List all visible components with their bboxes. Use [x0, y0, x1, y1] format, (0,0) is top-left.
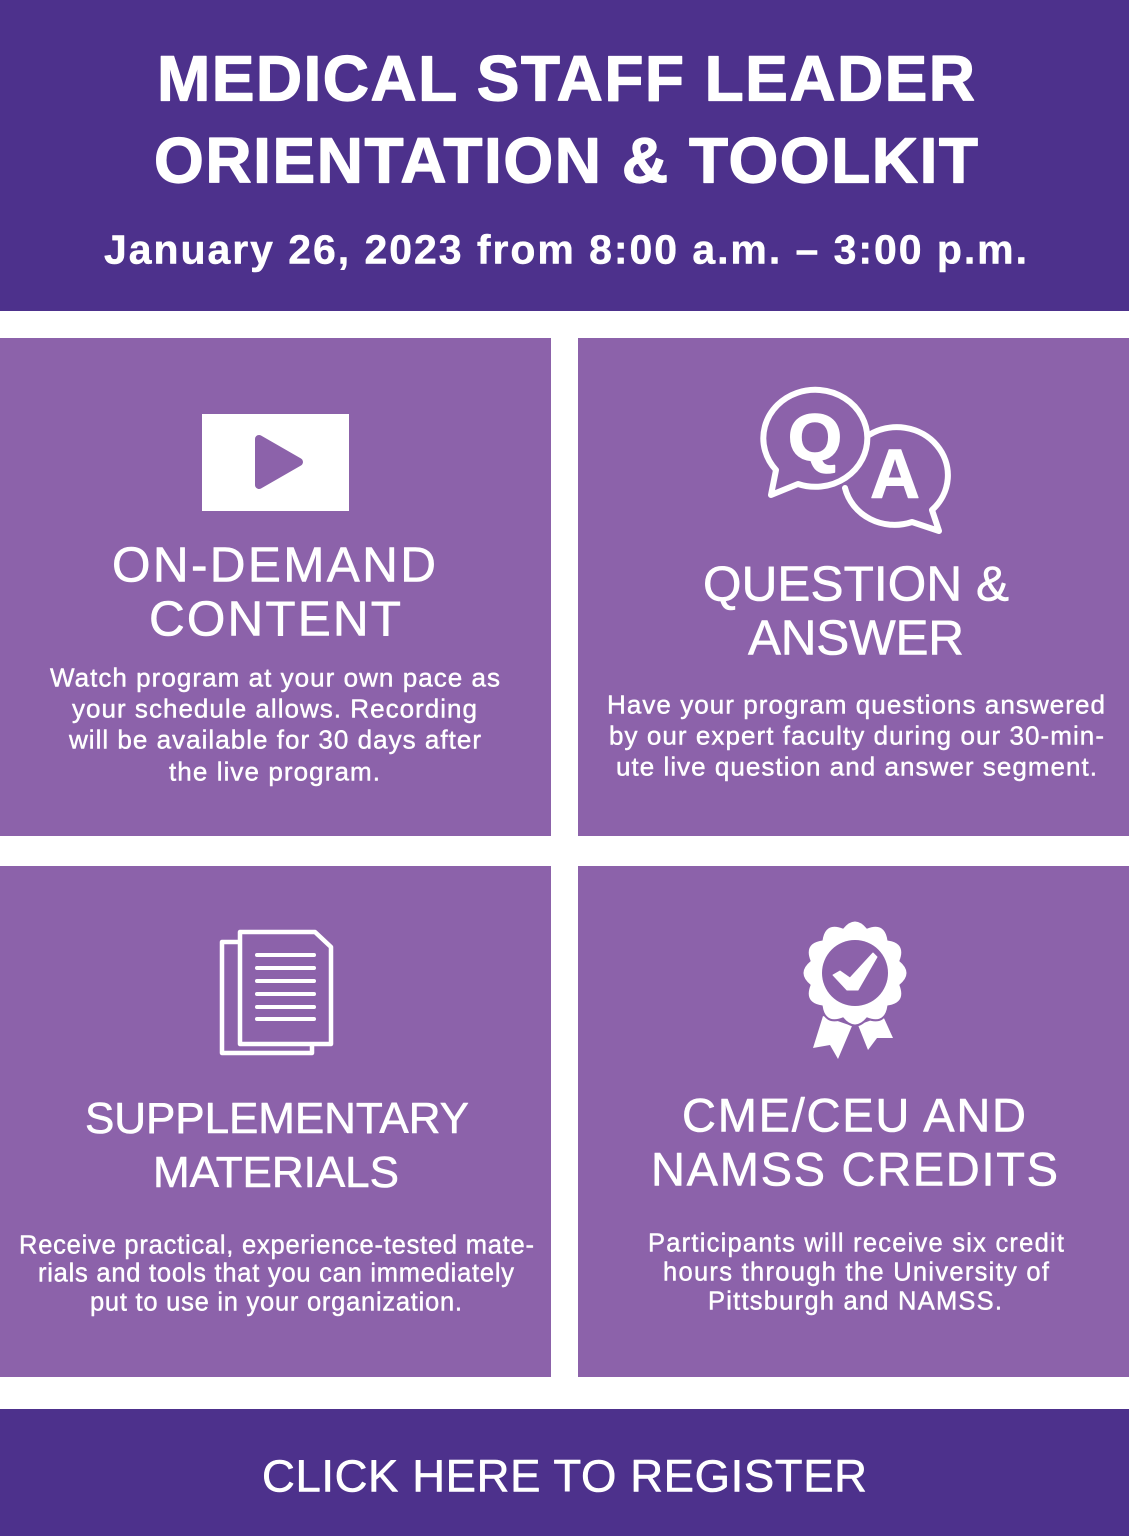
- text: credits description: hours through the University of: [663, 1258, 1050, 1286]
- text: supplementary description: rials and tools that you can immediately: [38, 1260, 514, 1288]
- heading: CME/CEU and NAMSS credits: NAMSS CREDITS: [651, 1142, 1058, 1196]
- text: credits description: Participants will receive six credit: [648, 1230, 1064, 1258]
- heading: supplementary materials: MATERIALS: [153, 1148, 399, 1197]
- text: on-demand description: your schedule allows. Recording: [72, 694, 477, 724]
- text: supplementary description: Receive practical, experience-tested mate-: [19, 1232, 534, 1260]
- panel: CME/CEU and NAMSS credits: [578, 866, 1129, 1377]
- register banner: [0, 1409, 1129, 1536]
- icon: video play: [202, 414, 349, 511]
- panel: on-demand content: [0, 338, 551, 836]
- text: on-demand description: [50, 662, 500, 786]
- text: credits description: Pittsburgh and NAMSS.: [708, 1288, 1002, 1316]
- text: on-demand description: the live program.: [169, 756, 380, 786]
- date and time: January 26, 2023 from 8:00 a.m. – 3:00 p.m.: [104, 226, 1027, 272]
- panel: question and answer: [578, 338, 1129, 836]
- panel: supplementary materials: [0, 866, 551, 1377]
- title: ORIENTATION & TOOLKIT: [154, 124, 978, 196]
- heading: CME/CEU and NAMSS credits: CME/CEU AND: [682, 1088, 1026, 1142]
- text: question and answer description: Have your program questions answered: [607, 690, 1105, 720]
- text: supplementary description: [19, 1232, 534, 1316]
- text: question and answer description: ute live question and answer segment.: [616, 752, 1097, 782]
- title: [154, 42, 978, 196]
- heading: on-demand content: [112, 538, 436, 646]
- heading: supplementary materials: SUPPLEMENTARY: [85, 1094, 469, 1143]
- register call to action: CLICK HERE TO REGISTER: [262, 1450, 867, 1502]
- icon: award ribbon with check: [804, 922, 906, 1059]
- text: on-demand description: Watch program at your own pace as: [50, 662, 500, 692]
- heading: on-demand content: ON-DEMAND: [112, 538, 436, 592]
- text: question and answer description: [607, 690, 1105, 782]
- heading: question and answer: [703, 556, 1009, 666]
- text: credits description: [648, 1230, 1064, 1316]
- title: MEDICAL STAFF LEADER: [157, 42, 975, 114]
- icon: question and answer bubbles: Q: [788, 400, 842, 474]
- heading: supplementary materials: [85, 1094, 469, 1197]
- heading: question and answer: ANSWER: [748, 610, 964, 666]
- header banner: [0, 0, 1129, 311]
- icon: question and answer bubbles: [763, 390, 948, 531]
- text: on-demand description: will be available for 30 days after: [68, 724, 481, 754]
- icon: documents: [222, 932, 331, 1053]
- text: question and answer description: by our expert faculty during our 30-min-: [609, 720, 1104, 750]
- heading: on-demand content: CONTENT: [149, 592, 401, 646]
- heading: question and answer: QUESTION &: [703, 556, 1009, 612]
- text: supplementary description: put to use in your organization.: [90, 1288, 462, 1316]
- heading: CME/CEU and NAMSS credits: [651, 1088, 1058, 1196]
- icon: question and answer bubbles: A: [870, 435, 920, 513]
